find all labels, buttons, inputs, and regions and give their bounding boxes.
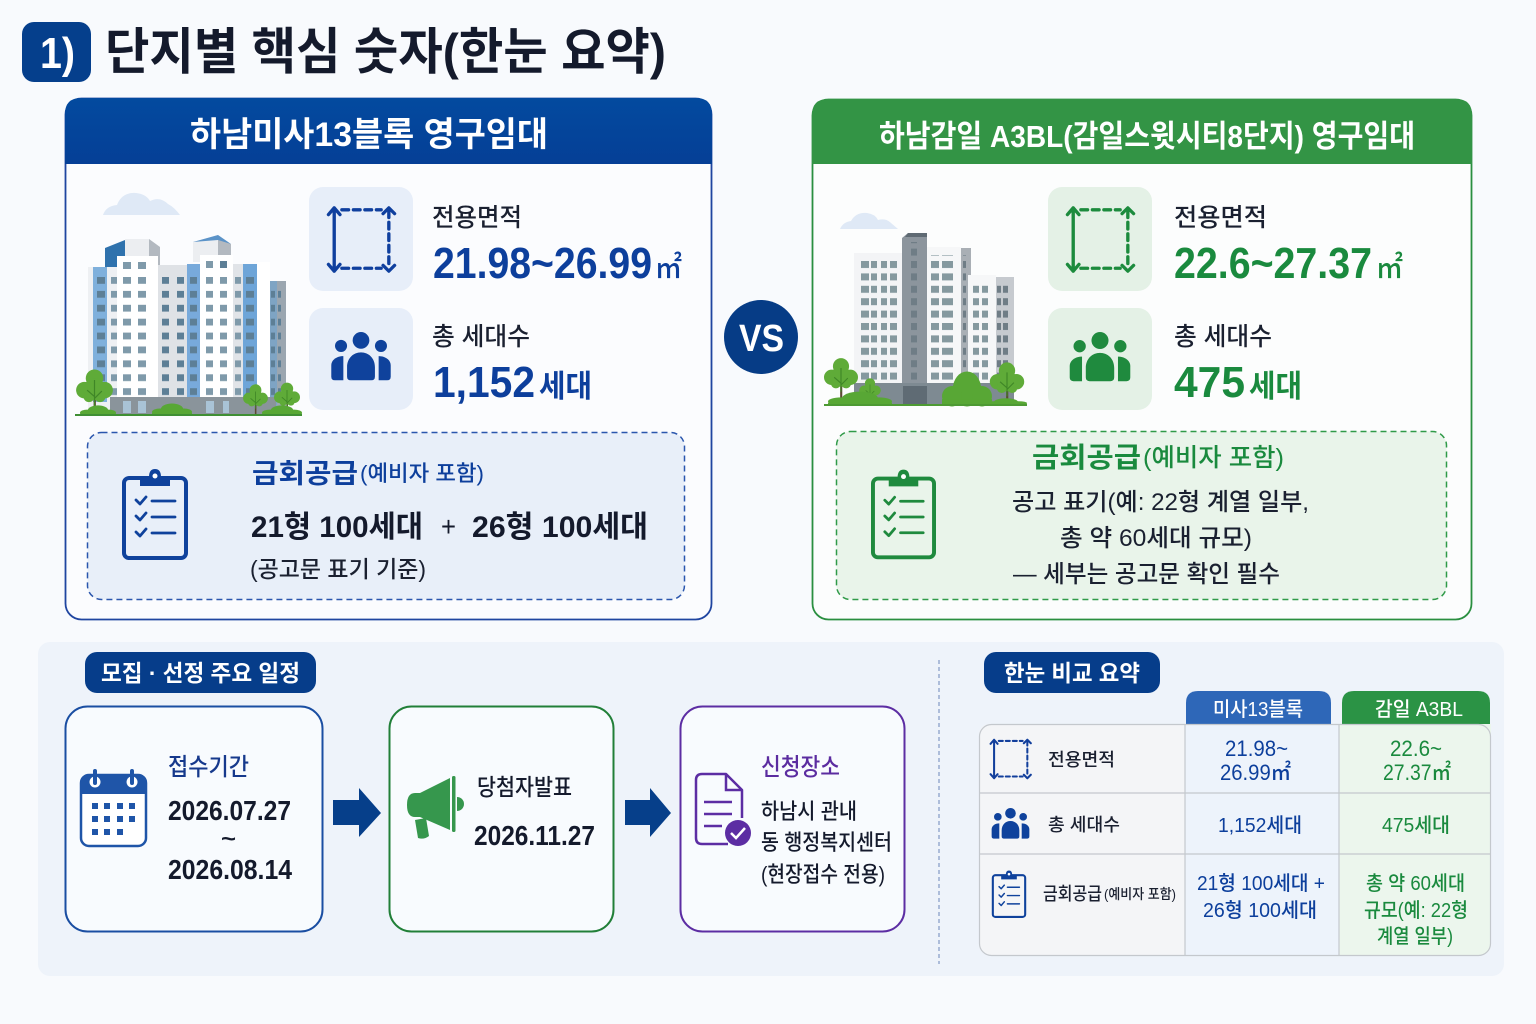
divider <box>938 660 940 964</box>
text: 금회공급 내용 <box>1012 442 1309 588</box>
row: 금회공급: 21형 100세대 + <box>1197 872 1325 895</box>
text: 총 세대수: 1,152 <box>433 358 535 407</box>
icon: clipboard <box>873 470 934 557</box>
icon: 전용면적 <box>1048 187 1152 291</box>
illustration: grey apartment building <box>824 213 1027 406</box>
table header: 미사13블록: 미사13블록 <box>1213 698 1303 721</box>
icon: 세대수 <box>309 308 413 410</box>
row: 총 세대수 <box>992 808 1450 839</box>
text: 총 세대수 <box>432 323 592 407</box>
icon: clipboard <box>124 469 186 558</box>
text: 총 세대수: 총 세대수 <box>1174 323 1272 351</box>
text: 전용면적 <box>1174 204 1403 288</box>
text: 전용면적 <box>432 204 682 288</box>
text: 당첨자발표: 당첨자발표 <box>477 774 572 800</box>
panel: 하남감일 A3BL <box>812 99 1472 620</box>
text: 신청장소: 신청장소 <box>761 754 840 781</box>
text: 접수기간: 2026.08.14 <box>168 854 292 885</box>
table header: 감일 A3BL: 감일 A3BL <box>1375 698 1463 721</box>
text: 총 세대수 <box>1174 323 1302 407</box>
text: 전용면적: 22.6~27.37 <box>1174 239 1372 288</box>
heading: 하남감일 <box>812 99 1472 164</box>
text: 금회공급 내용: 공고 표기(예: 22형 계열 일부, <box>1012 489 1309 516</box>
text: 신청장소: 동 행정복지센터 <box>761 830 892 855</box>
text: 금회공급 내용: (예비자 포함) <box>360 461 484 486</box>
row: 금회공급: 계열 일부) <box>1377 925 1453 948</box>
text: 총 세대수: 475 <box>1174 358 1245 407</box>
title: 단지별 핵심 숫자(한눈 요약) <box>105 24 666 80</box>
text: 총 세대수: 총 세대수 <box>432 323 530 351</box>
icon: 세대수 <box>1048 308 1152 410</box>
arrow <box>625 788 671 837</box>
heading: 하남감일: 하남감일 A3BL(감일스윗시티8단지) 영구임대 <box>879 119 1415 154</box>
row: 금회공급: 금회공급 <box>1043 884 1102 904</box>
card: 신청장소 <box>680 706 904 932</box>
text: 금회공급 내용: + <box>441 511 456 542</box>
card: 당첨자발표 <box>390 706 614 932</box>
text: 접수기간: 2026.07.27 <box>168 795 291 826</box>
text: 신청장소: (현장접수 전용) <box>761 862 885 887</box>
title: 1) <box>40 29 75 78</box>
row: 전용면적: 22.6~ <box>1390 736 1442 761</box>
heading: 한눈 비교 요약: 한눈 비교 요약 <box>1004 660 1140 686</box>
row: 총 세대수: 1,152세대 <box>1218 814 1302 837</box>
icon: megaphone <box>407 776 464 839</box>
row: 금회공급: 규모(예: 22형 <box>1364 899 1468 922</box>
heading: 모집 선정 주요 일정: 모집 · 선정 주요 일정 <box>101 660 300 686</box>
text: 금회공급 내용: — 세부는 공고문 확인 필수 <box>1013 561 1280 588</box>
row: 금회공급 <box>993 871 1468 948</box>
row: 전용면적: 21.98~ <box>1225 736 1288 761</box>
VS badge <box>724 300 798 374</box>
text: 접수기간: ~ <box>221 826 236 851</box>
row: 총 세대수: 475세대 <box>1382 814 1450 837</box>
text: 접수기간 <box>168 754 292 885</box>
illustration: blue apartment building <box>75 193 302 416</box>
text: 접수기간: 접수기간 <box>168 754 249 781</box>
row: 금회공급: 총 약 60세대 <box>1366 872 1465 895</box>
heading: 한눈 비교 요약 <box>984 652 1160 693</box>
text: 금회공급 내용: 총 약 60세대 규모) <box>1060 525 1252 552</box>
comparison table <box>979 691 1491 956</box>
panel: bottom section <box>38 642 1504 976</box>
row: 금회공급: (예비자 포함) <box>1104 886 1176 902</box>
text: 전용면적: 전용면적 <box>1174 204 1267 232</box>
heading: 하남미사: 하남미사13블록 영구임대 <box>190 116 548 154</box>
callout: 금회공급 감일 <box>836 432 1446 600</box>
text: 금회공급 내용: 금회공급 <box>1032 442 1141 473</box>
heading: 하남미사 <box>65 98 712 164</box>
icon: 전용면적 <box>309 187 413 291</box>
text: 당첨자발표 <box>474 774 595 851</box>
text: 전용면적: 전용면적 <box>432 204 522 232</box>
row: 금회공급: 26형 100세대 <box>1203 899 1317 922</box>
VS badge: VS <box>739 318 784 360</box>
row: 전용면적 <box>991 736 1451 785</box>
text: 신청장소 <box>761 754 892 887</box>
callout: 금회공급 미사 <box>88 432 684 600</box>
table header: 미사13블록 <box>1186 691 1331 724</box>
text: 금회공급 내용: 26형 100세대 <box>472 511 648 544</box>
arrow <box>333 788 381 837</box>
row: 전용면적: 전용면적 <box>1048 750 1115 770</box>
text: 금회공급 내용: 금회공급 <box>252 459 358 489</box>
row: 전용면적: 26.99㎡ <box>1220 760 1291 785</box>
text: 전용면적: ㎡ <box>655 251 682 285</box>
text: 금회공급 내용 <box>250 459 648 582</box>
text: 총 세대수: 세대 <box>539 369 592 404</box>
table header: 감일 A3BL <box>1342 691 1490 724</box>
icon: document check <box>696 774 751 846</box>
card: 접수기간 <box>66 706 322 932</box>
text: 금회공급 내용: (공고문 표기 기준) <box>250 556 426 582</box>
panel: 하남미사13블록 <box>65 98 712 620</box>
row: 총 세대수: 총 세대수 <box>1048 815 1120 835</box>
text: 전용면적: 21.98~26.99 <box>433 239 652 288</box>
text: 당첨자발표: 2026.11.27 <box>474 820 595 851</box>
text: 신청장소: 하남시 관내 <box>761 799 857 824</box>
text: 금회공급 내용: (예비자 포함) <box>1143 444 1284 472</box>
text: 총 세대수: 세대 <box>1249 369 1302 404</box>
text: 금회공급 내용: 21형 100세대 <box>251 511 423 544</box>
heading: 모집 선정 주요 일정 <box>85 652 316 693</box>
icon: calendar <box>80 771 147 846</box>
row: 전용면적: 27.37㎡ <box>1383 760 1451 785</box>
text: 전용면적: ㎡ <box>1376 251 1403 285</box>
